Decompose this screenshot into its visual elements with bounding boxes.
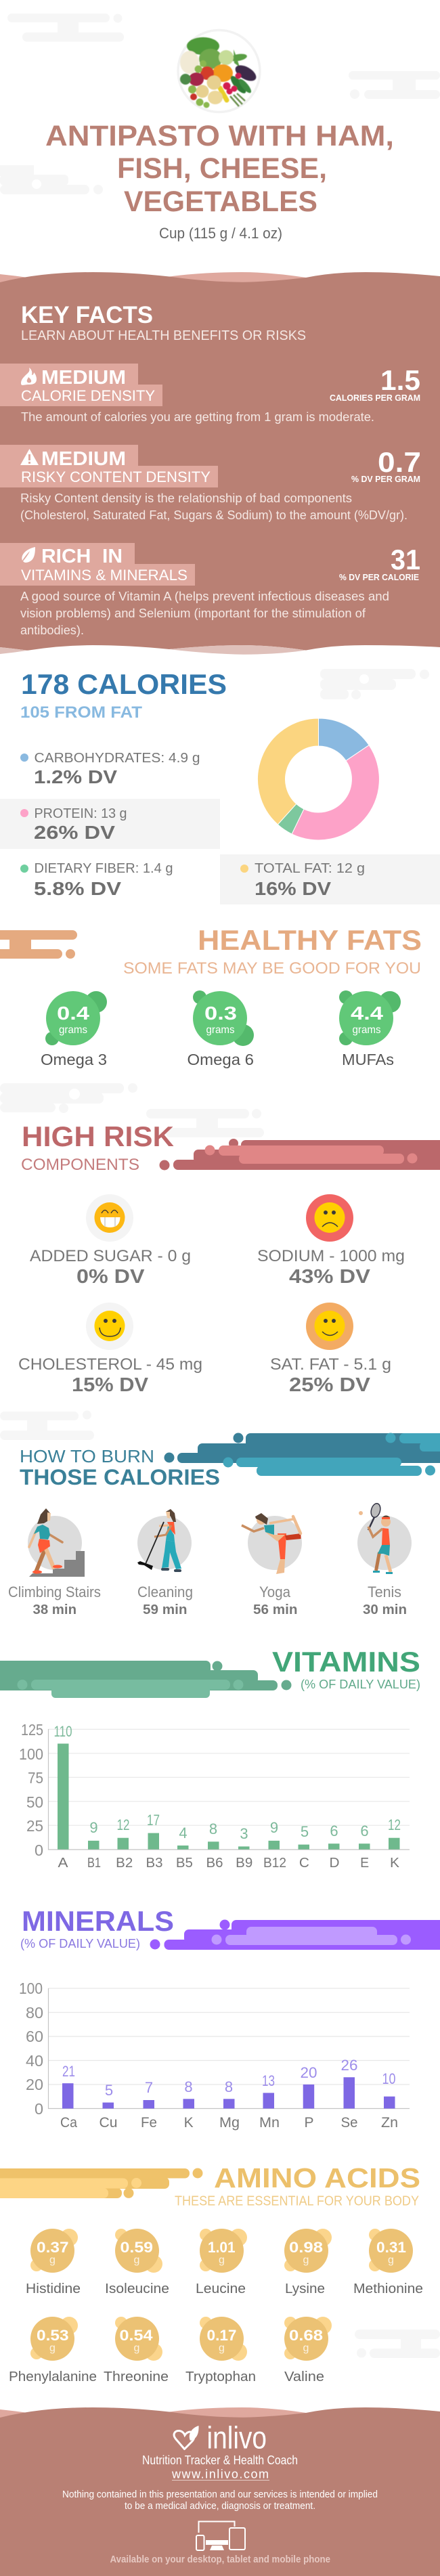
bar chart: minerals: Mg <box>219 2115 240 2131</box>
badge: lysine: g <box>303 2254 309 2266</box>
subheading: SOME FATS MAY BE GOOD FOR YOU <box>123 959 421 978</box>
badge: valine: g <box>303 2342 309 2354</box>
item: sodium: SODIUM - 1000 mg <box>257 1247 405 1265</box>
badge: MUFAs <box>339 990 401 1068</box>
bar chart: minerals <box>19 1980 410 2131</box>
badge: histidine: g <box>49 2254 56 2266</box>
legend: carbohydrates: CARBOHYDRATES: 4.9 g <box>34 751 200 766</box>
badge: omega 6 <box>187 990 254 1068</box>
tagline: Nutrition Tracker & Health Coach <box>142 2453 298 2467</box>
fact: calorie density: The amount of calories you are getting from 1 gram is moderate. <box>21 410 374 424</box>
bar chart: vitamins: B1 <box>87 1856 101 1871</box>
badge: isoleucine <box>105 2229 169 2296</box>
icon: flame <box>21 368 37 385</box>
legend: protein: PROTEIN: 13 g <box>34 806 127 821</box>
item: saturated fat: 25% DV <box>289 1374 371 1396</box>
banner graphic <box>150 1920 440 1950</box>
legend: protein: 26% DV <box>34 822 115 843</box>
badge: threonine: 0.54 <box>119 2327 153 2344</box>
bar chart: minerals: P <box>304 2115 314 2131</box>
bar chart: minerals: 8 <box>184 2078 193 2095</box>
bar chart: vitamins: A <box>58 1856 68 1871</box>
heading: HIGH RISK <box>22 1120 174 1152</box>
panel: key facts <box>0 272 440 655</box>
icon: woman sweeping <box>137 1509 192 1572</box>
badge: lysine: Lysine <box>285 2282 325 2296</box>
activity: tennis <box>357 1502 412 1617</box>
title: VEGETABLES <box>124 185 317 218</box>
bar chart: vitamins: 4 <box>179 1825 188 1841</box>
bar chart: vitamins: 0 <box>35 1841 43 1859</box>
bar chart: minerals: Ca <box>60 2115 77 2131</box>
activity: cleaning <box>137 1509 193 1617</box>
badge: tryptophan: g <box>219 2342 225 2354</box>
heading: VITAMINS <box>272 1646 420 1678</box>
item: cholesterol: 15% DV <box>72 1374 149 1396</box>
legend: dietary fiber: DIETARY FIBER: 1.4 g <box>34 861 173 876</box>
activity: climbing stairs <box>8 1508 101 1617</box>
subheading: 105 FROM FAT <box>20 703 142 722</box>
fact: rich in vitamins and minerals: RICH IN <box>41 546 123 567</box>
badge: phenylalanine: 0.53 <box>37 2327 69 2344</box>
bar chart: vitamins: 17 <box>147 1812 160 1829</box>
item: sodium <box>257 1194 405 1288</box>
bar chart: minerals: 5 <box>105 2082 113 2099</box>
logo: inlivo <box>207 2420 267 2455</box>
item: cholesterol <box>18 1303 202 1396</box>
availability note: Available on your desktop, tablet and mobile phone <box>110 2554 330 2565</box>
panel: high risk components <box>18 1120 440 1396</box>
bar chart: vitamins: 6 <box>360 1822 369 1839</box>
website link: www.inlivo.com <box>171 2468 269 2481</box>
fact: rich in vitamins and minerals: A good source of Vitamin A (helps prevent infectious diseases and <box>20 590 389 603</box>
badge: histidine: 0.37 <box>37 2239 69 2256</box>
icon: heart with leaf <box>174 2426 199 2449</box>
bar chart: minerals: 60 <box>26 2028 43 2045</box>
wave background <box>0 272 440 655</box>
subheading: (% OF DAILY VALUE) <box>20 1937 140 1950</box>
item: added sugar: 0% DV <box>76 1266 145 1288</box>
bar chart: minerals: 21 <box>62 2063 75 2080</box>
bar chart: vitamins: B12 <box>263 1856 286 1871</box>
subheading: (% OF DAILY VALUE) <box>301 1678 420 1691</box>
panel: how to burn those calories <box>8 1433 440 1617</box>
legend: total fat: TOTAL FAT: 12 g <box>255 861 365 876</box>
legend: dietary fiber: 5.8% DV <box>34 878 121 899</box>
bar chart: minerals: 100 <box>19 1980 43 1997</box>
bar chart: vitamins <box>19 1721 410 1871</box>
wave background <box>0 2407 440 2576</box>
badge: isoleucine: 0.59 <box>120 2239 153 2256</box>
icon: woman climbing stairs <box>28 1508 85 1577</box>
badge: omega 6: grams <box>206 1024 234 1036</box>
fact: calorie density <box>0 364 420 424</box>
banner graphic <box>0 1661 291 1698</box>
badge: isoleucine: Isoleucine <box>105 2282 169 2296</box>
item: saturated fat: SAT. FAT - 5.1 g <box>270 1355 391 1374</box>
banner graphic <box>164 1433 440 1476</box>
badge: lysine <box>284 2229 332 2296</box>
legend: total fat: 16% DV <box>255 878 331 899</box>
badge: phenylalanine <box>9 2317 97 2384</box>
bar chart: vitamins: 50 <box>26 1793 43 1811</box>
bar chart: minerals: Cu <box>99 2115 118 2131</box>
icon: grinning face <box>86 1194 133 1242</box>
badge: leucine: g <box>219 2254 225 2266</box>
badge: leucine <box>196 2229 247 2296</box>
title: FISH, CHEESE, <box>117 152 327 185</box>
header: food photo and title <box>45 30 394 242</box>
badge: methionine <box>353 2229 423 2296</box>
bar chart: vitamins: B2 <box>116 1856 133 1871</box>
badge: omega 6: 0.3 <box>204 1003 237 1024</box>
logo <box>174 2420 267 2455</box>
bar chart: vitamins: B3 <box>146 1856 162 1871</box>
panel: vitamins <box>0 1646 420 1871</box>
fact: calorie density: 1.5 <box>380 364 420 396</box>
bar chart: vitamins: 6 <box>330 1822 338 1839</box>
badge: isoleucine: g <box>134 2254 139 2266</box>
badge: omega 3 <box>41 991 107 1068</box>
badge: leucine: 1.01 <box>208 2239 236 2256</box>
fact: rich in vitamins and minerals: 31 <box>391 544 420 575</box>
badge: threonine: g <box>134 2342 139 2354</box>
badge: methionine: 0.31 <box>376 2239 406 2256</box>
bar chart: vitamins: 125 <box>21 1721 43 1739</box>
bar chart: vitamins: 8 <box>209 1820 217 1837</box>
icon: big smile face <box>86 1303 133 1350</box>
badge: phenylalanine: Phenylalanine <box>9 2370 97 2384</box>
badge: methionine: Methionine <box>353 2282 423 2296</box>
icon: mild smile face <box>306 1303 353 1350</box>
badge: tryptophan: Tryptophan <box>185 2370 256 2384</box>
panel: minerals <box>19 1905 440 2131</box>
badge: valine: Valine <box>284 2370 324 2384</box>
badge: tryptophan: 0.17 <box>207 2327 237 2344</box>
panel: calories <box>0 668 440 904</box>
activity: climbing stairs: Climbing Stairs <box>8 1584 101 1600</box>
bar chart: minerals: Zn <box>381 2115 398 2131</box>
heading: HEALTHY FATS <box>198 924 422 956</box>
heading: HOW TO BURN <box>20 1446 154 1466</box>
bar chart: minerals: 80 <box>26 2004 43 2022</box>
fact: calorie density: CALORIE DENSITY <box>21 387 155 404</box>
fact: risky content density: MEDIUM <box>41 448 126 470</box>
badge: threonine: Threonine <box>104 2370 169 2384</box>
badge: omega 3: grams <box>59 1024 87 1036</box>
fact: calorie density: CALORIES PER GRAM <box>330 393 420 403</box>
fact: calorie density: MEDIUM <box>41 367 126 389</box>
item: added sugar: ADDED SUGAR - 0 g <box>30 1247 191 1265</box>
item: added sugar <box>30 1194 191 1288</box>
badge: histidine: Histidine <box>26 2282 81 2296</box>
badge: phenylalanine: g <box>49 2342 56 2354</box>
bar chart: minerals: 20 <box>301 2064 317 2081</box>
bar chart: vitamins: 12 <box>116 1816 130 1833</box>
activity: yoga <box>242 1513 302 1617</box>
fact: risky content density: (Cholesterol, Saturated Fat, Sugars & Sodium) to the amount (%DV/gr). <box>20 508 408 522</box>
bar chart: minerals: 13 <box>262 2072 275 2089</box>
fact: risky content density: % DV PER GRAM <box>351 474 420 484</box>
legend: protein <box>20 806 127 843</box>
activity: yoga: 56 min <box>253 1602 298 1617</box>
badge: histidine <box>26 2229 81 2296</box>
bar chart: vitamins: 9 <box>89 1819 98 1836</box>
badge: valine <box>284 2317 332 2384</box>
badge: leucine: Leucine <box>196 2282 246 2296</box>
badge: lysine: 0.98 <box>289 2239 323 2256</box>
bar chart: minerals: 10 <box>382 2070 395 2087</box>
item: saturated fat <box>270 1303 391 1396</box>
banner graphic <box>0 2168 203 2198</box>
bar chart: vitamins: 25 <box>26 1817 43 1835</box>
legend: total fat <box>240 861 365 899</box>
icon: leaf <box>22 547 35 563</box>
bar chart: vitamins: 110 <box>54 1723 72 1740</box>
heading: MINERALS <box>22 1905 174 1937</box>
item: sodium: 43% DV <box>289 1266 371 1288</box>
bar chart: vitamins: K <box>390 1856 400 1871</box>
bar chart: minerals: 40 <box>26 2052 43 2070</box>
badge: omega 3: Omega 3 <box>41 1051 107 1068</box>
icon: man playing tennis <box>357 1502 412 1574</box>
subheading: LEARN ABOUT HEALTH BENEFITS OR RISKS <box>21 328 306 343</box>
badge: threonine <box>104 2317 169 2384</box>
donut chart <box>258 718 379 840</box>
fact: rich in vitamins and minerals <box>0 543 420 637</box>
bar chart: vitamins: B9 <box>236 1856 252 1871</box>
fact: rich in vitamins and minerals: vision problems) and Selenium (important for the stimulation of <box>20 607 366 620</box>
bar chart: minerals: K <box>184 2115 194 2131</box>
heading: KEY FACTS <box>21 302 153 328</box>
badge: omega 3: 0.4 <box>57 1003 90 1024</box>
bar chart: minerals: 0 <box>35 2100 43 2118</box>
activity: cleaning: 59 min <box>143 1602 187 1617</box>
badge: MUFAs: 4.4 <box>351 1003 384 1024</box>
disclaimer <box>62 2489 378 2512</box>
icon: sad face <box>306 1194 353 1242</box>
activity: yoga: Yoga <box>259 1584 291 1600</box>
badge: tryptophan <box>185 2317 256 2384</box>
icon: woman in yoga pose <box>242 1513 302 1574</box>
bar chart: vitamins: C <box>299 1856 309 1871</box>
bar chart: vitamins: 12 <box>388 1816 401 1833</box>
banner graphic <box>160 1139 440 1170</box>
fact: rich in vitamins and minerals: antibodies). <box>20 624 84 637</box>
heading: 178 CALORIES <box>21 668 227 700</box>
subheading: THESE ARE ESSENTIAL FOR YOUR BODY <box>175 2193 419 2208</box>
bar chart: minerals: 8 <box>225 2078 233 2095</box>
fact: rich in vitamins and minerals: VITAMINS & MINERALS <box>21 567 188 584</box>
legend: dietary fiber <box>20 861 173 899</box>
food photo in ring <box>178 30 260 112</box>
title: ANTIPASTO WITH HAM, <box>45 120 394 152</box>
panel: footer <box>0 2407 440 2576</box>
fact: risky content density: Risky Content density is the relationship of bad components <box>20 492 352 505</box>
disclaimer: to be a medical advice, diagnosis or treatment. <box>125 2500 315 2512</box>
bar chart: minerals: Mn <box>259 2115 280 2131</box>
badge: MUFAs: grams <box>352 1024 380 1036</box>
subheading: COMPONENTS <box>21 1156 139 1174</box>
bar chart: minerals: 7 <box>145 2079 153 2096</box>
legend: carbohydrates: 1.2% DV <box>34 766 117 787</box>
bar chart: minerals: Se <box>341 2115 357 2131</box>
badge: MUFAs: MUFAs <box>342 1051 394 1068</box>
bar chart: vitamins: 75 <box>28 1769 43 1787</box>
fact: risky content density <box>0 445 421 522</box>
bar chart: vitamins: E <box>360 1856 369 1871</box>
bar chart: vitamins: B6 <box>206 1856 223 1871</box>
badge: omega 6: Omega 6 <box>187 1051 254 1068</box>
heading: AMINO ACIDS <box>214 2162 420 2193</box>
panel: amino acids <box>0 2162 423 2384</box>
fact: risky content density: 0.7 <box>378 446 421 478</box>
icon: warning triangle <box>20 449 39 465</box>
bar chart: vitamins: D <box>329 1856 340 1871</box>
bar chart: minerals: 26 <box>341 2057 357 2074</box>
disclaimer: Nothing contained in this presentation and our services is intended or implied <box>62 2489 378 2500</box>
bar chart: vitamins: 3 <box>240 1825 248 1842</box>
bar chart: minerals: 20 <box>26 2076 43 2093</box>
heading <box>20 1446 220 1489</box>
legend: carbohydrates <box>20 751 200 787</box>
badge: methionine: g <box>388 2254 394 2266</box>
bar chart: vitamins: 100 <box>19 1745 43 1763</box>
title <box>45 120 394 218</box>
activity: tennis: 30 min <box>363 1602 407 1617</box>
badge: valine: 0.68 <box>289 2327 323 2344</box>
heading: THOSE CALORIES <box>20 1465 220 1489</box>
panel: healthy fats <box>0 924 422 1068</box>
activity: cleaning: Cleaning <box>137 1584 193 1600</box>
item: cholesterol: CHOLESTEROL - 45 mg <box>18 1355 202 1374</box>
activity: climbing stairs: 38 min <box>32 1602 76 1617</box>
bar chart: vitamins: B5 <box>176 1856 193 1871</box>
fact: rich in vitamins and minerals: % DV PER CALORIE <box>339 572 419 582</box>
icon: devices <box>196 2521 245 2550</box>
bar chart: vitamins: 5 <box>301 1823 309 1840</box>
bar chart: vitamins: 9 <box>270 1819 278 1836</box>
activity: tennis: Tenis <box>368 1584 401 1600</box>
fact: risky content density: RISKY CONTENT DENSITY <box>21 468 211 485</box>
banner graphic <box>0 930 77 959</box>
bar chart: minerals: Fe <box>141 2115 157 2131</box>
serving size: Cup (115 g / 4.1 oz) <box>159 225 282 242</box>
